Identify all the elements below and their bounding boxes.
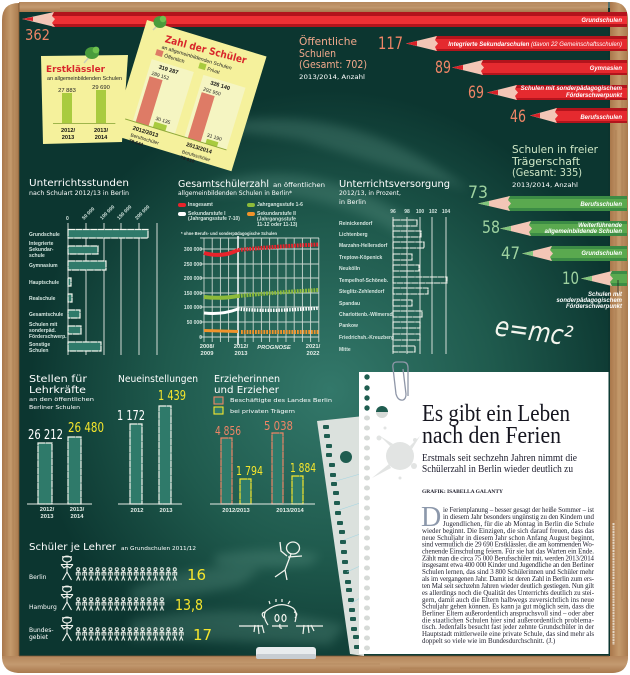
chart: Stellen für Lehrkräfte: Lehrkräfte [29,385,86,396]
torn notebook sheet behind article [317,416,364,656]
article body text: neue Schuljahr in diesem Jahr schon Anfang August beginnt, [422,535,594,542]
chart: Erzieherinnen und Erzieher [210,374,333,514]
chart: Unterrichtsversorgung: Neukölln [339,266,360,272]
chart: Gesamtschülerzahl: 11-12 oder 11-13) [257,222,298,228]
heading: Öffentliche Schulen: (Gesamt: 702) [299,58,367,71]
chart: Gesamtschülerzahl: Jahrgangsstufe 1-6 [257,202,303,208]
chart: Stellen für Lehrkräfte: an den öffentlichen [29,397,95,403]
heading: Schulen in freier Trägerschaft: Schulen in freier [512,143,598,156]
chart: Schüler je Lehrer: an Grundschulen 2011/12 [121,546,196,552]
chart: Gesamtschülerzahl: 100 000 [184,305,202,311]
chart: Gesamtschülerzahl: Insgesamt [188,202,213,208]
chart: Stellen für Lehrkräfte: 26 212 [28,428,63,443]
chart: Unterrichtsstunden: 100 000 [99,204,116,221]
note: Erstklässler: 2013/ [94,128,108,134]
headline: Es gibt ein Leben [422,401,570,427]
article body text: als im vergangenen Jahr. Damit ist deren Zahl in Berlin zum ers- [422,576,595,583]
ring holes [364,374,388,650]
note: Erstklässler [41,55,128,144]
note: Zahl der Schüler: Zahl der Schüler [164,34,248,67]
red pencil: Integrierte Sekundarschulen 117: 117 [378,34,403,54]
row: Hamburg: Hamburg [29,604,57,611]
chart: Unterrichtsversorgung: Lichtenberg [339,232,368,238]
article body text: ten Mal seit sechzehn Jahren wieder deutlich gestiegen. Nun gilt [422,583,594,590]
red pencil: Grundschulen 362 [22,12,627,44]
note: Zahl der Schüler [110,20,267,176]
article body text: ie Ferienplanung – besser gesagt der heiße Sommer – ist [443,507,594,514]
subheading: Erstmals seit sechzehn Jahren nimmt die [422,453,577,464]
note: Zahl der Schüler: 292 950 [202,87,222,98]
green pencil: Weiterführende allgemeinbildende Schulen 58: Weiterführende [578,223,623,229]
chart: Gesamtschülerzahl: 2009 [201,351,214,357]
chart: Erzieherinnen und Erzieher: 1 884 [290,461,316,475]
headline: nach den Ferien [422,423,561,449]
article body text: in diesem Jahr besonders ungünstig zu den Kindern und [443,514,595,521]
row: Berlin: 16 [187,566,206,584]
chart: Unterrichtsversorgung: Unterrichtsversorgung [339,179,450,190]
chart: Gesamtschülerzahl: 2022 [307,351,319,357]
note: Erstklässler: 29 690 [92,85,110,91]
article body text: sind vermutlich die 29 690 Erstklässler, die am kommenden Wo- [422,542,595,548]
row: Bundesgebiet: Bundes- [29,627,54,634]
green pencil: Berufsschulen 73: Berufsschulen [580,202,622,208]
chart: Gesamtschülerzahl: 150 000 [184,291,202,297]
chart: Neueinstellungen: 2012 [131,508,143,514]
red pencil: Gymnasien 89: 89 [435,58,451,78]
note: Zahl der Schüler: Öffentlich [163,52,186,65]
chart: Unterrichtsversorgung: Friedrichsh.-Kreuzberg [339,335,394,341]
chart: Stellen für Lehrkräfte: 26 480 [68,421,104,436]
chart: Unterrichtsstunden: 150 000 [116,204,133,221]
chart: Unterrichtsversorgung: 102 [429,209,437,215]
note: Zahl der Schüler: 326 140 [209,80,230,92]
row: Bundesgebiet: 17 [193,626,212,644]
chart: Stellen für Lehrkräfte: Stellen für [29,374,88,385]
row: Hamburg: 13,8 [175,596,203,614]
chart: Stellen für Lehrkräfte [27,374,104,520]
chart: Unterrichtsversorgung: Spandau [339,301,360,307]
chart: Stellen für Lehrkräfte: 2013/ [70,507,85,513]
chart: Schüler je Lehrer: Schüler je Lehrer [29,542,117,553]
chart: Unterrichtsversorgung: 96 [390,209,396,215]
chart: Erzieherinnen und Erzieher: Beschäftigte des Landes Berlin [230,398,333,404]
article body text: chenende Einschulung feiern. Für sie hat das Warten ein Ende. [422,548,594,556]
chart: Unterrichtsstunden: 50 000 [81,206,96,221]
green pencil: Grundschulen 47: Grundschulen [581,251,622,257]
article body text: insgesamt etwa 400 000 Kinder und Jugendliche an den Berliner [422,562,595,569]
chart: Unterrichtsversorgung [339,179,450,354]
chart: Gesamtschülerzahl: 300 000 [184,247,202,253]
chart: Erzieherinnen und Erzieher: bei privaten Trägern [230,409,296,415]
chart: Gesamtschülerzahl: 50 000 [187,320,202,326]
article body text: D [421,502,441,533]
green pencil: Weiterführende allgemeinbildende Schulen 58: 58 [482,218,500,238]
heading: Öffentliche Schulen: Schulen [299,47,336,60]
chart: Unterrichtsversorgung: 98 [404,209,410,215]
panel: article paper [359,372,608,654]
chart: Gesamtschülerzahl: an öffentlichen [273,182,325,189]
chart: Neueinstellungen: 1 172 [117,409,145,424]
chart: Stellen für Lehrkräfte: Berliner Schulen [29,405,80,411]
chart: Schüler je Lehrer [29,542,212,644]
chart: Unterrichtsstunden: 200 000 [134,204,151,221]
red pencil: Schulen mit sonderpädagogischem Förderschwerpunkt 69: 69 [468,83,484,103]
note: Zahl der Schüler: 31 190 [206,133,223,143]
note: Zahl der Schüler: 30 135 [155,116,171,126]
red pencil: Schulen mit sonderpädagogischem Förderschwerpunkt 69: Förderschwerpunkt [566,93,623,99]
chart: Unterrichtsstunden: Gymnasium [29,263,58,269]
note: Zahl der Schüler: 78 610 [179,155,195,165]
article body text: Jugendlichen, für die ab Montag in Berlin die Schule [443,521,594,528]
green pencil: Schulen mit sonderpädagogischem Förderschwerpunkt 10 [556,269,627,310]
chart: Unterrichtsstunden: Grundschule [29,232,60,238]
chart: Unterrichtsstunden: Förderschwerp. [29,334,67,340]
chart: Unterrichtsversorgung: 104 [442,209,450,215]
note: Zahl der Schüler: 2012/2013 [132,126,159,139]
chart: Gesamtschülerzahl: allgemeinbildenden Schulen in Berlin* [178,190,292,197]
icon: peeking chalk face [239,599,323,634]
chart: Erzieherinnen und Erzieher: 4 856 [215,424,241,438]
heading: Öffentliche Schulen: Öffentliche [299,35,357,48]
red pencil: Schulen mit sonderpädagogischem Förderschwerpunkt 69 [468,83,627,103]
icon: green pin on first note [84,47,99,63]
chart: Neueinstellungen [117,374,198,514]
chart: Gesamtschülerzahl: 200 000 [184,276,202,282]
chart: Gesamtschülerzahl: Gesamtschülerzahl [178,179,269,190]
chart: Unterrichtsversorgung: Mitte [339,347,351,353]
chart: Erzieherinnen und Erzieher: 2012/2013 [222,508,250,514]
heading: Öffentliche Schulen: 2013/2014, Anzahl [299,73,365,81]
article body text: wieder beginnt. Die Einzigen, die sich darauf freuen, dass das [422,528,594,535]
chart: Unterrichtsstunden [29,178,157,355]
green pencil: Weiterführende allgemeinbildende Schulen 58: allgemeinbildende Schulen [545,229,622,235]
chart: Unterrichtsstunden: sonderpäd. [29,328,57,334]
chart: Stellen für Lehrkräfte: 2013 [41,514,54,520]
red pencil: Gymnasien 89 [435,58,627,78]
row: Berlin [29,556,206,584]
icon: green pin on second note [153,16,166,30]
credit strip on right frame [612,523,614,645]
chart: Unterrichtsstunden: Integrierte [29,241,54,247]
article body text: Berliner Eltern außerordentlich anspruchsvoll sind – oder aber [422,610,595,618]
red pencil: Berufsschulen 46: Berufsschulen [580,115,622,121]
heading: Öffentliche Schulen [299,35,367,81]
chart: Unterrichtsstunden: Hauptschule [29,280,59,286]
article body text: Hauptstadt mittlerweile eine private Schule, das sind mehr als [422,631,594,638]
chart: Gesamtschülerzahl: 2012/ [234,344,249,350]
chart: Unterrichtsversorgung: Marzahn-Hellersdorf [339,243,388,249]
article body text: doppelt so viele wie im Bundesdurchschnitt. (J.) [422,638,555,645]
red pencil: Grundschulen 362: Grundschulen [581,18,622,24]
note: Erstklässler: an allgemeinbildenden Schulen [47,76,122,82]
icon: paper clip [393,362,408,400]
icon: ink splat [372,426,420,480]
subheading: Schülerzahl in Berlin wieder deutlich zu [422,464,574,475]
green pencil: Weiterführende allgemeinbildende Schulen 58 [482,218,627,238]
chart: Gesamtschülerzahl [178,179,325,357]
chart: Gesamtschülerzahl: 0 [199,335,202,341]
red pencil: Integrierte Sekundarschulen 117: Integrierte Sekundarschulen (davon 22 Gemeinschaftsschulen) [448,42,622,48]
chart: Unterrichtsstunden: Sekundar- [29,247,54,253]
chart: Gesamtschülerzahl: (Jahrgangsstufe 7-10) [188,216,240,222]
chart: Unterrichtsstunden: Sonstige [29,342,50,348]
chart: Unterrichtsstunden: Unterrichtsstunden [29,178,129,189]
chalk formula e=mc²: e=mc² [493,311,575,353]
chart: Stellen für Lehrkräfte: 2014 [71,514,84,520]
heading: Schulen in freier Trägerschaft: (Gesamt: 335) [512,166,582,179]
chart: Neueinstellungen: 2013 [160,508,173,514]
chart: Unterrichtsversorgung: Treptow-Köpenick [339,255,383,261]
chart: Unterrichtsstunden: schule [29,253,45,259]
chart: Gesamtschülerzahl: 2021/ [306,344,321,350]
article body text: Schulen lernen, das sind 3 800 Schülerinnen und Schüler mehr [422,569,595,576]
note: Zahl der Schüler: Berufsschüler [130,132,160,147]
red pencil: Berufsschulen 46: 46 [510,107,526,127]
green pencil: Berufsschulen 73 [468,183,627,211]
chart: Erzieherinnen und Erzieher: 1 794 [236,464,263,478]
row: Bundesgebiet [29,617,212,644]
red pencil: Integrierte Sekundarschulen 117 [378,34,627,54]
green pencil: Schulen mit sonderpädagogischem Förderschwerpunkt 10: 10 [562,269,579,289]
chart: Unterrichtsversorgung: Steglitz-Zehlendorf [339,289,385,295]
chart: Unterrichtsversorgung: Charlottenb.-Wilmersd. [339,312,395,318]
chart: Unterrichtsversorgung: Tempelhof-Schöneb. [339,278,389,284]
red pencil: Grundschulen 362: 362 [25,26,50,44]
chart: Erzieherinnen und Erzieher: Erzieherinnen [214,374,280,385]
article body text: gern, damit auch die Eltern halbwegs zuversichtlich ins neue [422,597,594,604]
chart: Gesamtschülerzahl: * ohne Berufs- und sonderpädagogische Schulen [181,231,277,237]
article body text: Schuljahr gehen können. Es kann ja gut möglich sein, dass die [422,604,594,610]
chart: Unterrichtsstunden: Schulen mit [29,322,58,328]
row: Berlin: Berlin [29,574,47,581]
note: Erstklässler: 27 883 [58,88,76,94]
note: Zahl der Schüler: an allgemeinbildenden Schulen [161,45,233,72]
note: Erstklässler: 2014 [95,135,108,141]
chart: Erzieherinnen und Erzieher: 2013/2014 [276,508,304,514]
chart: Erzieherinnen und Erzieher: und Erzieher [214,385,280,396]
heading: Schulen in freier Trägerschaft [511,143,598,189]
chalk stick on the ledge [256,647,316,659]
note: Erstklässler: Erstklässler [46,65,106,75]
chart: Unterrichtsversorgung: 2012/13, in Prozent, [339,190,401,197]
chart: Unterrichtsstunden: nach Schulart 2012/13 in Berlin [29,190,129,197]
chart: Erzieherinnen und Erzieher: 5 038 [264,419,293,433]
note: Erstklässler: 2012/ [61,128,75,134]
chart: Gesamtschülerzahl: 2013 [235,351,248,357]
chart: Unterrichtsversorgung: 100 [416,209,424,215]
chart: Gesamtschülerzahl: 2008/ [200,344,215,350]
chart: Neueinstellungen: 1 439 [158,389,186,404]
note: Zahl der Schüler: Privat [206,66,221,76]
green pencil: Schulen mit sonderpädagogischem Förderschwerpunkt 10: Förderschwerpunkt [566,304,623,310]
chart: Gesamtschülerzahl: Sekundarstufe I [188,211,226,217]
note: Zahl der Schüler: 2013/2014 [185,142,213,156]
chart: Gesamtschülerzahl: (Jahrgangsstufe [257,216,296,222]
article body text: es allerdings noch die Qualität des Unterrichts deutlich zu stei- [422,590,595,597]
subheading [422,453,577,475]
green pencil: Grundschulen 47: 47 [501,244,520,264]
red pencil: Schulen mit sonderpädagogischem Förderschwerpunkt 69: Schulen mit sonderpädagogischem [521,86,623,92]
headline [422,401,570,449]
note: Zahl der Schüler: 289 152 [151,71,170,82]
heading: Schulen in freier Trägerschaft: 2013/2014, Anzahl [512,181,578,189]
chart: Unterrichtsstunden: Schulen [29,348,48,354]
chart: Stellen für Lehrkräfte: 2012/ [40,507,55,513]
note: Zahl der Schüler: Berufsschüler [181,149,211,164]
row: Bundesgebiet: gebiet [29,634,49,641]
chart: Unterrichtsstunden: Gesamtschule [29,312,63,318]
note: Zahl der Schüler: 319 287 [158,65,179,76]
note: Erstklässler: 2013 [62,135,74,141]
green pencil: Schulen mit sonderpädagogischem Förderschwerpunkt 10: Schulen mit [588,292,623,298]
chart: Unterrichtsversorgung: in Berlin [339,199,366,206]
green pencil: Berufsschulen 73: 73 [468,183,488,203]
article body text: tisch. Jedenfalls besucht fast jeder zehnte Grundschüler in der [422,624,595,631]
red pencil: Gymnasien 89: Gymnasien [590,66,622,72]
chart: Unterrichtsversorgung: Reinickendorf [339,221,373,227]
chart: Unterrichtsstunden: Realschule [29,296,56,302]
row: Hamburg [29,586,203,614]
article body text [421,502,595,645]
chart: Gesamtschülerzahl: Sekundarstufe II [257,211,297,217]
green pencil: Grundschulen 47 [501,244,627,264]
chart: Neueinstellungen: Neueinstellungen [118,374,198,385]
chart: Unterrichtsstunden: 0 [66,216,69,222]
chart: Gesamtschülerzahl: 250 000 [184,262,202,268]
chart: Unterrichtsversorgung: Pankow [339,323,358,329]
byline: GRAFIK: ISABELLA GALANTY [422,489,503,495]
icon: cheering stick figure [275,542,302,580]
heading: Schulen in freier Trägerschaft: Trägerschaft [511,155,581,168]
article body text: Zählt man die circa 75 000 Berufsschüler mit, werden 2013/2014 [422,556,595,562]
red pencil: Berufsschulen 46 [510,107,627,127]
note: Zahl der Schüler: 78 644 [128,138,144,148]
green pencil: Schulen mit sonderpädagogischem Förderschwerpunkt 10: sonderpädagogischem [556,298,623,304]
article body text: die staatlichen Schulen hier sind außerordentlich problema- [422,618,595,624]
chart: Gesamtschülerzahl: PROGNOSE [257,345,292,351]
